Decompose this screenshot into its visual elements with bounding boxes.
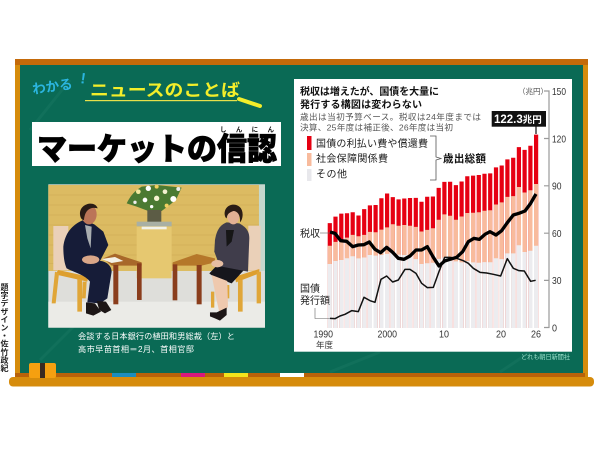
x axis: 年度 [316,340,334,350]
series label [31,70,240,101]
chalk tray [9,373,594,386]
y axis: 90 [552,180,562,192]
chart heading [300,85,439,111]
label: bond issuance: 発行額 [300,294,330,307]
y axis: 0 [552,322,557,334]
person: prime minister [209,205,249,321]
legend: 国債の利払い費や償還費 [316,137,428,150]
chart note: 決算、25年度は補正後、26年度は当初 [300,122,453,132]
chair left [52,226,88,312]
x axis: 26 [531,328,541,340]
chart heading: 発行する構図は変わらない [300,98,422,111]
series label: ! [79,70,87,88]
title banner: しんにん [220,126,274,134]
y axis: 150 [552,86,566,98]
series label: ニュースのことば [90,81,240,100]
x axis: 1990 [314,328,333,340]
x axis: 10 [439,328,449,340]
callout: total 122.3 trillion yen: 122.3兆円 [494,114,542,126]
legend: その他 [316,168,347,180]
y axis [518,86,566,334]
series label: わかる [31,76,74,97]
panel: chart background [294,79,572,352]
icon: eraser [29,363,56,378]
legend [307,136,486,181]
blackboard [15,59,588,377]
chart note: 歳出は当初予算ベース。税収は24年度までは [300,111,481,122]
design credit: 題字デザイン・佐竹政紀 [0,283,9,372]
x axis: 2000 [378,328,397,340]
source credit: どれも朝日新聞社 [521,352,571,361]
label: tax revenue [300,227,330,240]
legend: 社会保障関係費 [316,152,388,165]
pedestal [137,210,172,278]
chart note [300,111,481,132]
label: tax revenue: 税収 [300,227,320,240]
chart heading: 税収は増えたが、国債を大量に [300,85,439,98]
label: bond issuance [300,282,330,318]
photo caption: 高市早苗首相＝2月、首相官邸 [78,344,194,354]
label: bond issuance: 国債 [300,282,320,295]
flowers [127,185,182,211]
title banner: マーケットの信認 [37,132,277,167]
line: government bond issuance [330,257,536,319]
table left [102,254,142,304]
photo: bank governor and prime minister [48,184,265,328]
photo caption: 会談する日本銀行の植田和男総裁（左）と [78,331,235,341]
icon: chalk [239,99,260,106]
line: tax revenue [330,194,536,266]
y axis: 30 [552,275,562,287]
legend: 歳出総額 [443,152,486,165]
person: governor [63,204,112,316]
stacked bar chart: spending [330,135,536,328]
callout: total 122.3 trillion yen [492,111,546,134]
x axis: 20 [496,328,506,340]
x axis [314,328,541,350]
y axis: 120 [552,134,566,146]
photo caption [78,331,235,354]
y axis: 60 [552,228,562,240]
chair right [211,226,261,312]
table right [173,254,215,304]
y axis: （兆円） [518,86,548,96]
